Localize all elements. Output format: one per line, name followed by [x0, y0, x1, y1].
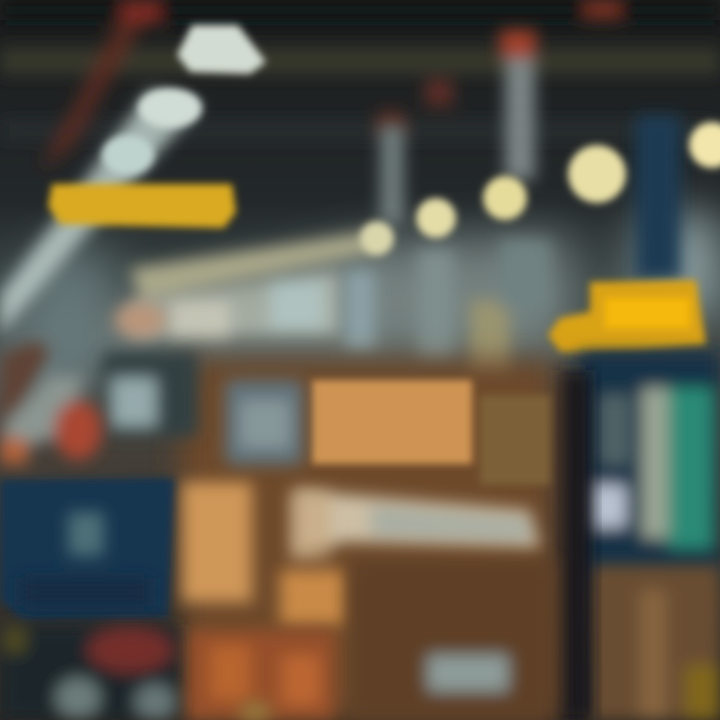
- stacked cardboard boxes: [180, 360, 555, 720]
- hanging columns: [345, 30, 681, 380]
- light beam: [0, 90, 385, 340]
- mid-wall band: [0, 215, 720, 410]
- blue bin: [0, 478, 174, 620]
- yellow sign right: [548, 280, 706, 352]
- ceiling lamps: [102, 25, 720, 255]
- left warm shapes: [0, 302, 166, 464]
- yellow sign left: [48, 184, 236, 228]
- middle white wrapped box: [295, 490, 540, 555]
- upper box: [312, 380, 550, 485]
- ceiling beams: [0, 0, 720, 170]
- left box: [182, 482, 345, 625]
- lower box: [185, 560, 555, 720]
- lower left clutter: [0, 625, 271, 720]
- dark aisle: [555, 370, 591, 720]
- right shelf: [580, 352, 720, 720]
- monitors: [102, 352, 303, 465]
